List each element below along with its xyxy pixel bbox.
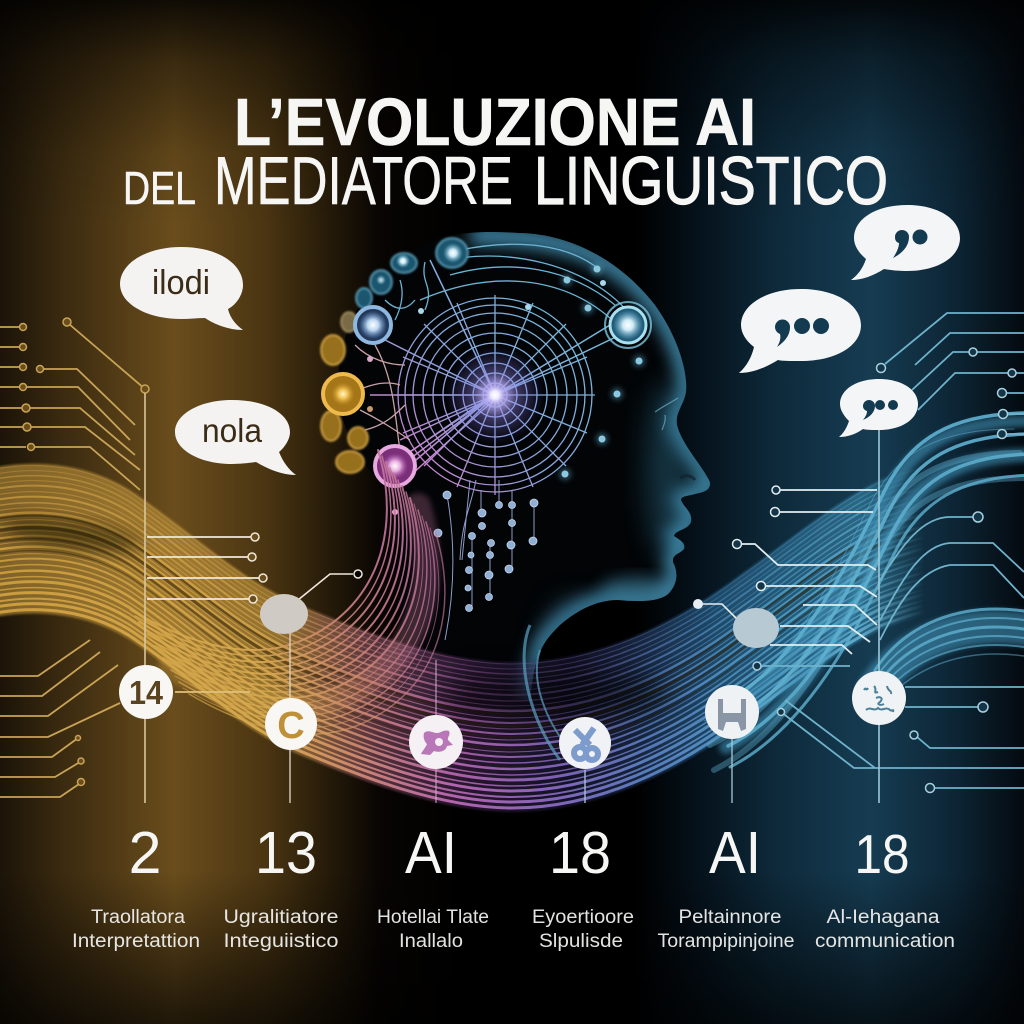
speech bubble: top right: [851, 205, 960, 280]
blue top lobes: [356, 238, 468, 308]
caption 6: Al-Iehagana: [826, 907, 940, 928]
brain nodes: [321, 238, 651, 515]
speech bubble: ilodi: [120, 247, 243, 330]
caption 4: [532, 907, 634, 952]
flowing ribbon: [0, 462, 921, 813]
speech bubble: small right: [839, 379, 918, 437]
speech bubble: nola: [175, 400, 296, 475]
speech bubble: nola: nola: [202, 412, 263, 449]
caption 5: [658, 907, 794, 952]
title: LINGUISTICO: [534, 143, 888, 219]
right blue circuits: [585, 313, 1024, 803]
big numbers row: 18: [549, 820, 611, 886]
left main axis and leader lines: [145, 393, 436, 803]
big numbers row: 13: [255, 820, 317, 886]
big numbers row: AI: [709, 820, 761, 886]
right white leader lines: [732, 486, 877, 654]
right grey disc with leader: [693, 599, 779, 648]
caption 2: [224, 907, 338, 952]
dark streaks: [0, 514, 916, 750]
caption 5: Peltainnore: [678, 907, 782, 928]
caption row: [72, 907, 955, 952]
dark shading of ribbon interior: [0, 511, 670, 721]
small dots in the head: [367, 266, 642, 515]
neck teal sweep: [524, 625, 570, 760]
caption 4: Slpulisde: [539, 931, 623, 952]
caption 6: [815, 907, 955, 952]
icon circle: pink shape: [409, 715, 463, 769]
brain web: [352, 244, 628, 495]
caption 3: [377, 907, 489, 952]
neural connector dots: [434, 480, 538, 640]
icon circle: H shape: [705, 685, 759, 739]
title: L’EVOLUZIONE AI: [234, 85, 756, 160]
big numbers row: 2: [129, 820, 161, 886]
left gold circuits: [0, 318, 250, 797]
node: gold: [323, 374, 363, 414]
caption 1: Interpretattion: [72, 931, 200, 952]
brow and nostril detail: [655, 398, 695, 480]
speech bubble: ilodi: ilodi: [152, 264, 210, 302]
gold lobes: [321, 312, 368, 473]
icon circle: scribble glyphs: [852, 671, 906, 725]
icon circle: 14: 14: [129, 674, 164, 711]
title: [123, 85, 888, 219]
node: cyan: [605, 302, 651, 348]
speech bubble: middle right: [739, 289, 861, 373]
caption 6: communication: [815, 931, 955, 952]
head silhouette: [338, 232, 710, 700]
caption 3: Inallalo: [399, 931, 463, 952]
big numbers row: [129, 820, 910, 886]
blue rising strands: [704, 413, 1024, 770]
caption 3: Hotellai Tlate: [377, 907, 489, 928]
caption 5: Torampipinjoine: [658, 931, 794, 952]
node: pink: [375, 446, 415, 486]
neck strands: [131, 450, 445, 734]
caption 1: [72, 907, 200, 952]
icon circle: 14: [119, 665, 173, 719]
title: DEL: [123, 162, 196, 214]
caption 2: Ugralitiatore: [224, 907, 338, 928]
big numbers row: 18: [854, 823, 910, 885]
central glow: [445, 345, 545, 445]
big numbers row: AI: [405, 820, 457, 886]
icon circle: blue knot: [559, 717, 611, 769]
icon circle: C: [265, 698, 317, 750]
title: MEDIATORE: [214, 143, 513, 219]
left grey disc with leader: [260, 570, 362, 634]
node: blue: [355, 307, 391, 343]
icon circle: C: C: [277, 705, 305, 747]
caption 2: Integuiistico: [224, 931, 338, 952]
caption 1: Traollatora: [91, 907, 185, 928]
caption 4: Eyoertioore: [532, 907, 634, 928]
